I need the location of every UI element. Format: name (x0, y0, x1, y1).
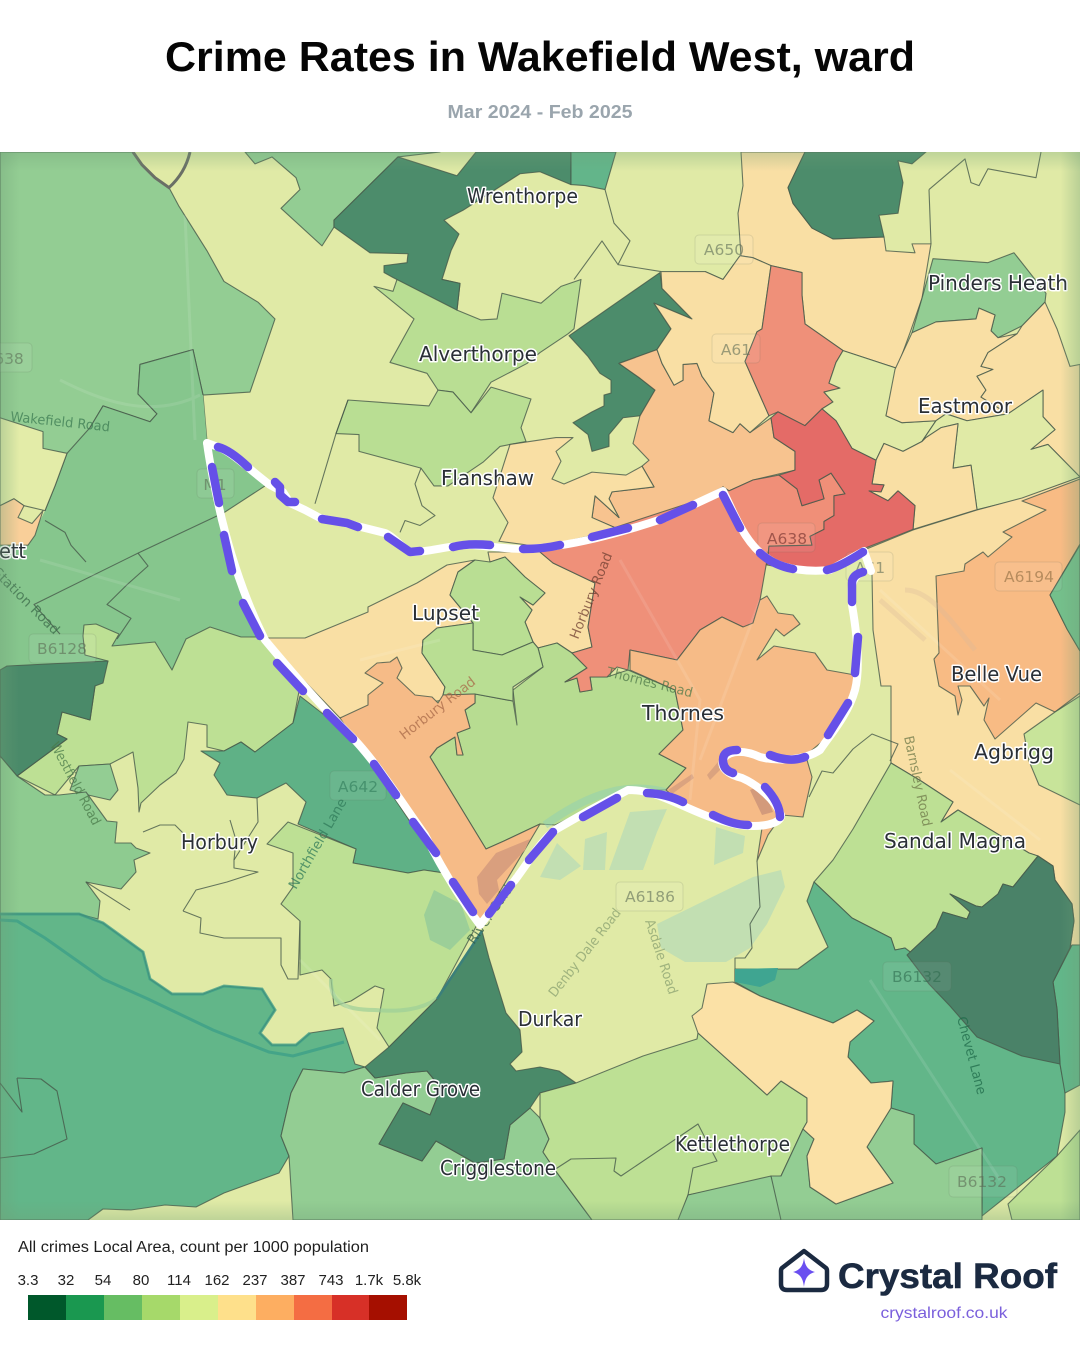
road labels (0, 235, 1062, 1197)
legend values: 387 (280, 1272, 306, 1289)
place: Lupset: Lupset (412, 601, 479, 625)
legend values: 80 (133, 1272, 149, 1289)
shield: B6128: B6128 (37, 640, 87, 658)
shield: A638 west edge (0, 343, 32, 372)
place: Horbury: Horbury (181, 830, 258, 854)
road name: Northfield Lane: Northfield Lane (286, 796, 350, 892)
road name: Asdale Road: Asdale Road (641, 917, 681, 996)
subtitle: date range: Mar 2024 - Feb 2025 (448, 102, 632, 122)
place: Durkar: Durkar (518, 1007, 583, 1031)
place: Agbrigg: Agbrigg (974, 740, 1054, 764)
legend values: 5.8k (393, 1272, 422, 1289)
shield: A6194: A6194 (1004, 568, 1054, 586)
river (0, 914, 344, 1056)
legend colour scale (28, 1295, 407, 1320)
ward boundary: white casing and purple dashes (207, 443, 871, 925)
place: Flanshaw: Flanshaw (441, 466, 534, 490)
shield: B6128 (29, 634, 96, 663)
shield: M1 (197, 469, 234, 498)
place: Pinders Heath: Pinders Heath (928, 271, 1068, 295)
wordmark: Crystal Roof (838, 1257, 1057, 1296)
place: Eastmoor: Eastmoor (918, 394, 1013, 418)
shield: A6194 (995, 562, 1062, 591)
legend values: 162 (204, 1272, 230, 1289)
shield: A61 north (712, 334, 760, 363)
road name: Horbury Road north: Horbury Road (567, 550, 616, 641)
shield: B6132 south: B6132 (957, 1173, 1007, 1191)
shield: M1: M1 (203, 476, 227, 494)
shield: A61 (846, 552, 893, 581)
road name: Wakefield Road: Wakefield Road (10, 409, 111, 435)
icon: house with star (781, 1251, 827, 1290)
shield: B6132 south (949, 1166, 1017, 1197)
shield: A638 (758, 523, 815, 552)
western wards (0, 624, 592, 1220)
choropleth map (0, 152, 1080, 1220)
legend values: 743 (318, 1272, 344, 1289)
road name: River Calder: River Calder (464, 871, 525, 947)
shield: B6132 (883, 962, 951, 991)
legend title: All crimes Local Area, count per 1000 population (18, 1239, 369, 1256)
road name: Chevet Lane: Chevet Lane (953, 1015, 989, 1096)
place: Wrenthorpe: Wrenthorpe (467, 184, 578, 208)
map edge fade (0, 152, 1080, 1220)
place: Crigglestone: Crigglestone (440, 1156, 556, 1180)
shield: A642: A642 (338, 778, 378, 796)
place: Thornes: Thornes (641, 701, 724, 725)
road name: Denby Dale Road: Denby Dale Road (546, 906, 625, 1000)
shield: A638: A638 (767, 530, 807, 548)
title: Crime Rates in Wakefield West, ward (165, 33, 915, 80)
southern wards (540, 734, 1080, 1220)
legend values: 32 (58, 1272, 74, 1289)
legend values: 237 (242, 1272, 268, 1289)
shield: A61: A61 (855, 559, 885, 577)
legend values: 114 (167, 1272, 191, 1289)
northern wards (0, 152, 1080, 693)
place labels (0, 184, 1068, 1180)
eastern wards (864, 477, 1080, 948)
shield: A61 north: A61 (721, 341, 751, 359)
shield: A6186: A6186 (625, 888, 675, 906)
legend (18, 1239, 422, 1320)
shield: A650 (695, 235, 753, 264)
road name: Barnsley Road: Barnsley Road (900, 735, 935, 828)
shield: A650: A650 (704, 241, 744, 259)
road name: Thornes Road: Thornes Road (604, 664, 694, 701)
road name: Westfield Road: Westfield Road (46, 739, 104, 828)
legend values (18, 1272, 422, 1289)
legend values: 3.3 (18, 1272, 38, 1289)
place: Calder Grove: Calder Grove (361, 1077, 480, 1101)
url: crystalroof.co.uk (880, 1305, 1009, 1322)
logo: Crystal Roof (781, 1251, 1057, 1322)
place: Sandal Magna: Sandal Magna (884, 829, 1026, 853)
faint street network (40, 215, 1040, 1180)
place: Alverthorpe: Alverthorpe (419, 342, 537, 366)
place: Belle Vue: Belle Vue (951, 662, 1042, 686)
legend values: 1.7k (355, 1272, 384, 1289)
shield: A642 (330, 771, 386, 800)
place: Kettlethorpe: Kettlethorpe (675, 1132, 790, 1156)
road name: Horbury Road south: Horbury Road (397, 674, 479, 743)
shield: B6132: B6132 (892, 968, 942, 986)
shield: A6186 (616, 882, 683, 911)
central wards (263, 492, 857, 925)
legend values: 54 (95, 1272, 111, 1289)
